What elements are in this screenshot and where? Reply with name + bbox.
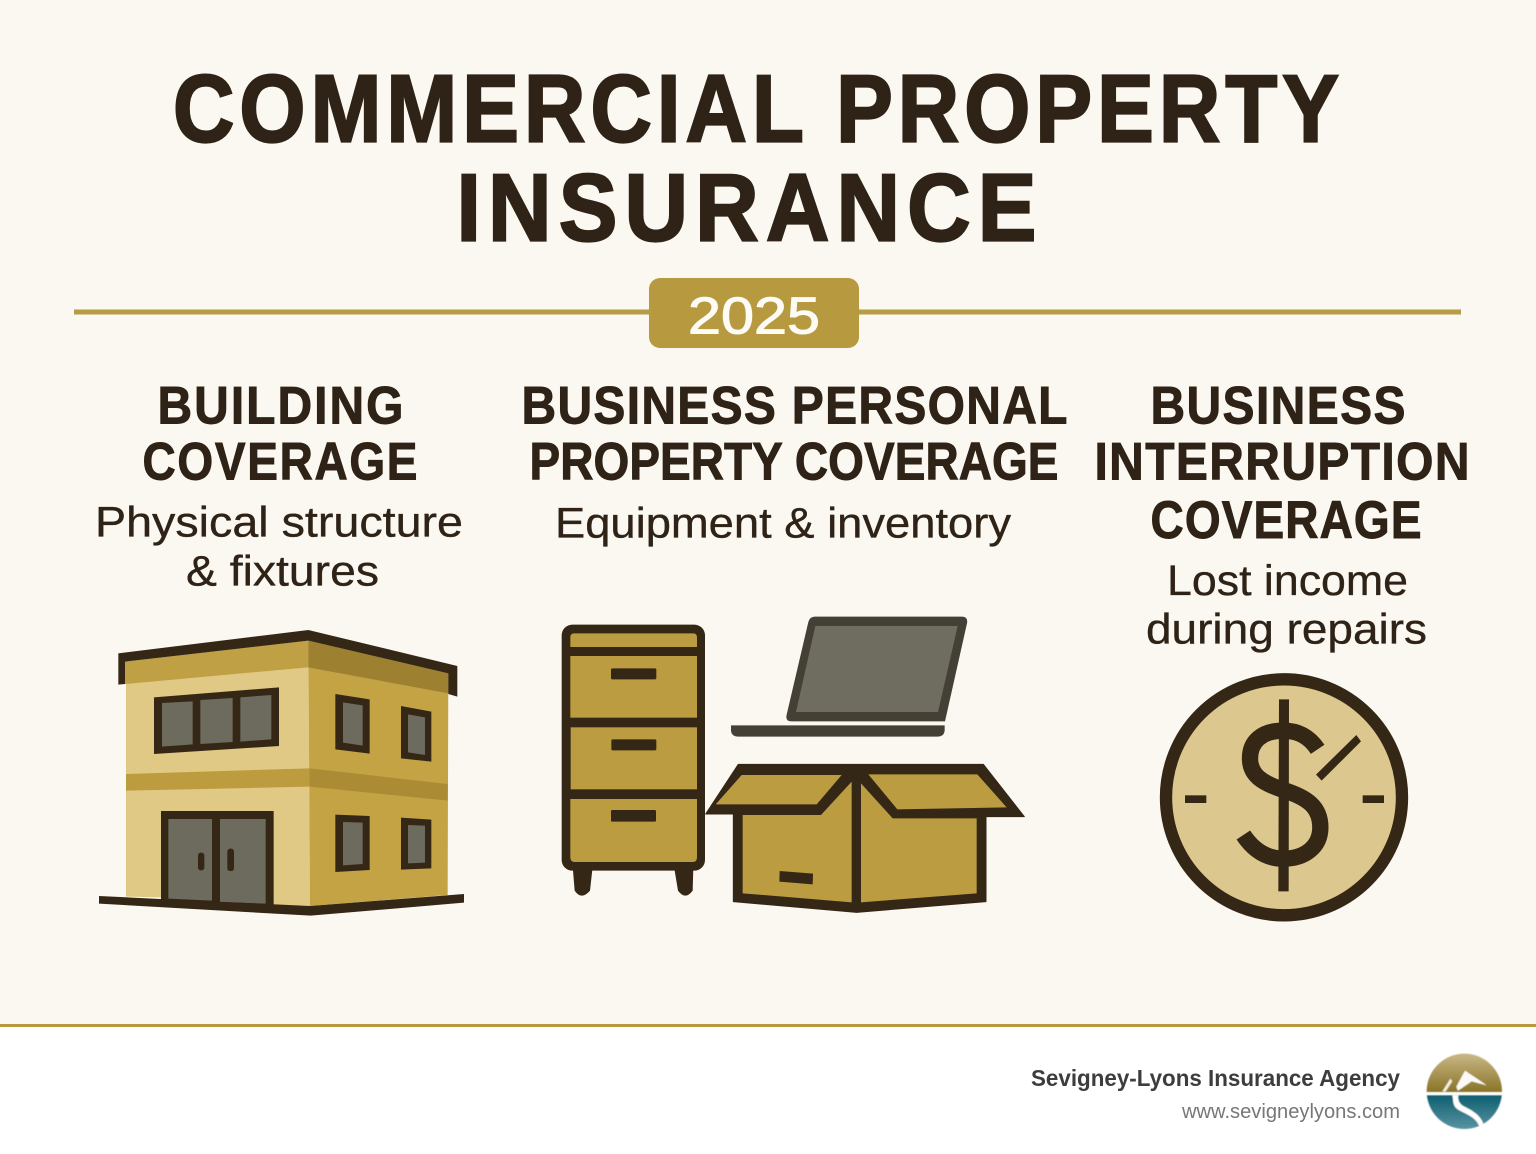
heading: building coverage	[142, 375, 418, 491]
heading: building coverage: BUILDING	[158, 375, 404, 435]
year divider: 2025	[688, 288, 820, 346]
heading: business interruption coverage: BUSINESS	[1150, 375, 1406, 435]
heading: business personal property coverage: BUSINESS PERSONAL	[522, 375, 1068, 435]
text: interruption description	[1146, 557, 1427, 654]
footer	[0, 1024, 1536, 1154]
heading: business personal property coverage: PROPERTY COVERAGE	[530, 432, 1058, 491]
text: building description: Physical structure	[95, 499, 463, 547]
title: COMMERCIAL PROPERTY	[173, 56, 1339, 163]
text: building description: & fixtures	[186, 547, 379, 595]
icon: filing cabinet, laptop and box	[562, 617, 1024, 912]
text: building description	[95, 499, 463, 595]
footer company name: Sevigney-Lyons Insurance Agency	[1031, 1065, 1400, 1091]
icon: laptop	[731, 617, 967, 737]
year divider	[74, 278, 1461, 348]
title: INSURANCE	[456, 154, 1036, 261]
heading: business interruption coverage: COVERAGE	[1150, 490, 1422, 550]
icon: open box	[706, 764, 1024, 912]
heading: building coverage: COVERAGE	[142, 432, 418, 491]
title	[173, 56, 1339, 261]
icon: filing cabinet	[562, 625, 705, 896]
heading: business personal property coverage	[522, 375, 1068, 491]
panel: business interruption coverage	[1094, 375, 1470, 915]
heading: business interruption coverage	[1094, 375, 1470, 550]
footer website: www.sevigneylyons.com	[1181, 1101, 1400, 1123]
panel: building coverage	[95, 375, 464, 916]
heading: business interruption coverage: INTERRUPTION	[1094, 431, 1470, 491]
text: interruption description: during repairs	[1146, 606, 1427, 654]
text: interruption description: Lost income	[1167, 557, 1408, 605]
icon: mountain and river logo	[1425, 1053, 1505, 1132]
icon: building	[99, 630, 464, 916]
icon: dollar clock	[1166, 679, 1402, 915]
text: equipment description: Equipment & inventory	[555, 500, 1012, 548]
panel: business personal property coverage	[522, 375, 1068, 912]
